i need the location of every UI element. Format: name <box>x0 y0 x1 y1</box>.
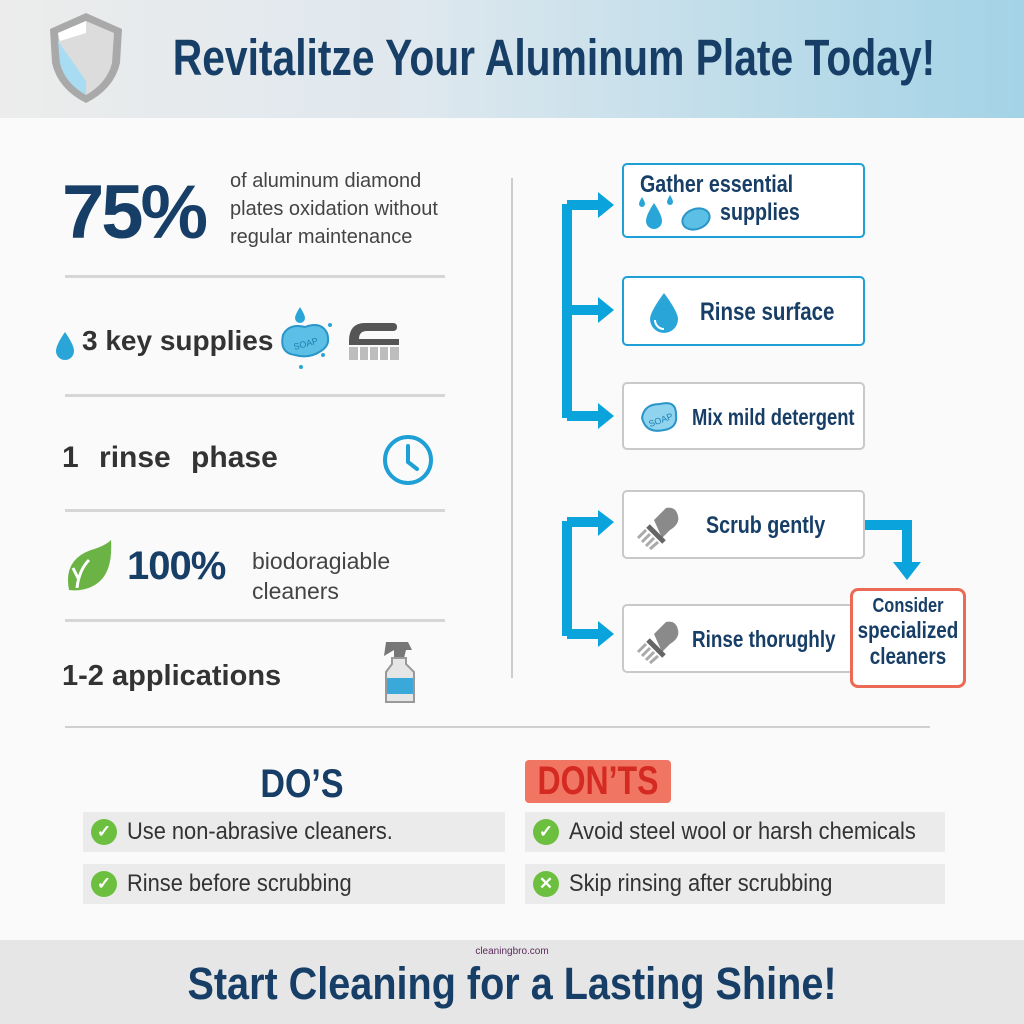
stat: 100% <box>68 540 390 604</box>
icon: drop <box>56 332 74 360</box>
panel: donts: ✕ <box>539 874 553 893</box>
icon: clock <box>383 435 433 485</box>
stat: 1 rinse phase: 1 rinse phase <box>62 441 278 474</box>
arrow: to specialized <box>865 520 921 580</box>
panel: donts: Avoid steel wool or harsh chemicals <box>569 818 916 845</box>
panel: donts: ✓ <box>539 822 553 841</box>
stat: 100%: 100% <box>127 544 225 588</box>
step: rinse thoroughly: Rinse thorughly <box>692 626 836 652</box>
header band <box>0 0 1024 118</box>
icon: brush <box>349 323 399 360</box>
step: mix detergent: SOAP <box>647 411 674 429</box>
heading: dos: DO’S <box>260 762 344 806</box>
panel: dos: Use non-abrasive cleaners. <box>127 818 393 845</box>
icon: sponge <box>281 307 332 369</box>
step: gather: supplies <box>720 199 800 226</box>
stat: 100%: biodoragiable <box>252 548 390 574</box>
panel: dos: ✓ <box>97 874 111 893</box>
icon: shield <box>50 13 122 103</box>
arrows: bracket 1 <box>562 192 614 429</box>
footer text: Start Cleaning for a Lasting Shine! <box>187 958 837 1009</box>
stat: 1-2 applications <box>62 642 415 703</box>
step: rinse surface: Rinse surface <box>700 298 834 326</box>
step: gather: Gather essential <box>640 171 793 198</box>
step: rinse thoroughly <box>622 604 865 673</box>
icon: sponge: SOAP <box>292 336 319 352</box>
stat: 75%: of aluminum diamond plates oxidation without regular maintenance <box>230 170 438 248</box>
callout: consider specialized cleaners <box>850 588 966 688</box>
step: scrub gently <box>622 490 865 559</box>
step: rinse surface <box>622 276 865 346</box>
icon: spray bottle <box>384 642 415 703</box>
title: Revitalitze Your Aluminum Plate Today! <box>173 29 935 86</box>
stat: 3 key supplies: 3 key supplies <box>82 325 273 356</box>
stat: 75% <box>62 170 438 255</box>
divider <box>65 726 930 728</box>
panel: dos <box>83 762 505 904</box>
heading: donts: DON’TS <box>538 760 658 803</box>
icon: leaf <box>68 540 112 590</box>
callout: consider specialized cleaners: cleaners <box>870 643 946 669</box>
footer band <box>0 940 1024 1024</box>
footer band: cleaningbro.com <box>475 946 549 957</box>
callout: consider specialized cleaners: Consider <box>872 595 944 617</box>
step: scrub gently: Scrub gently <box>706 512 825 539</box>
stat: 75%: 75% <box>62 170 205 255</box>
panel: donts <box>525 760 945 904</box>
panel: dos: Rinse before scrubbing <box>127 870 352 897</box>
stat: 1 rinse phase <box>62 435 433 485</box>
flowchart <box>562 192 921 647</box>
step: gather <box>622 163 865 238</box>
arrows: bracket 2 <box>562 510 614 647</box>
stat: 1-2 applications: 1-2 applications <box>62 660 281 692</box>
step: mix detergent: Mix mild detergent <box>692 404 855 430</box>
stat: 100%: cleaners <box>252 578 339 604</box>
vertical divider <box>511 178 513 678</box>
panel: donts: Skip rinsing after scrubbing <box>569 870 832 897</box>
stat: 3 key supplies <box>56 307 399 369</box>
panel: dos: ✓ <box>97 822 111 841</box>
step: mix detergent <box>622 382 865 450</box>
callout: consider specialized cleaners: specialized <box>858 617 958 643</box>
